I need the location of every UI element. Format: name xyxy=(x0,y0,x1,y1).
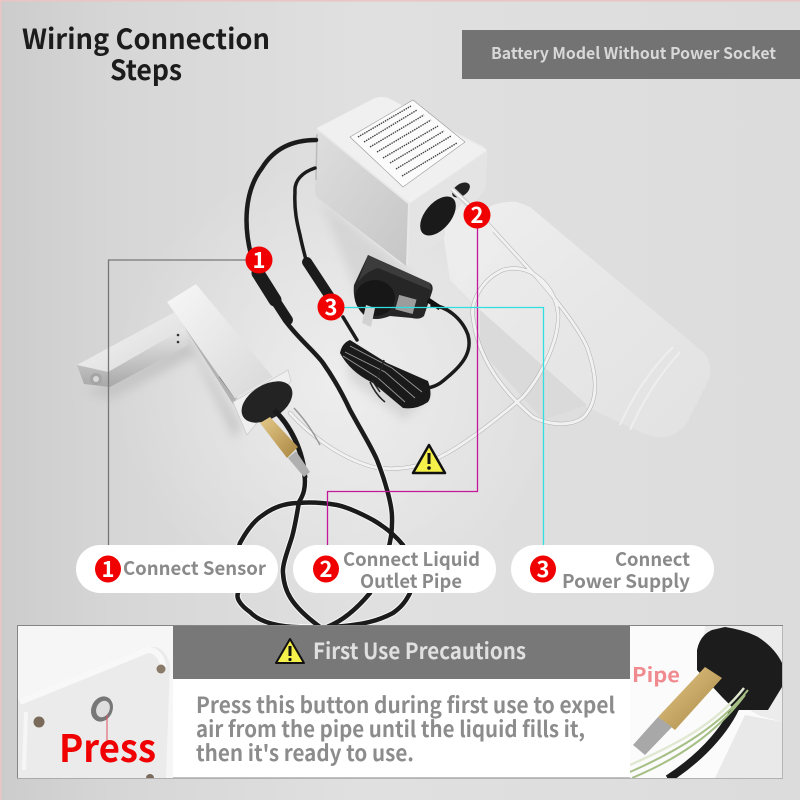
step pill 2: Connect Liquid xyxy=(343,545,480,572)
model banner xyxy=(462,30,800,79)
instruction text: then it's ready to use. xyxy=(196,736,414,768)
title: Steps xyxy=(110,49,182,89)
instruction text xyxy=(196,688,615,768)
soft shadows xyxy=(85,200,430,440)
header bar: First Use Precautions xyxy=(313,634,526,666)
marker 3: 3 xyxy=(325,290,337,322)
step pill 3: 3 xyxy=(537,552,549,584)
title xyxy=(22,18,270,89)
icon: warning xyxy=(276,639,304,663)
step pill 1: 1 xyxy=(102,552,114,584)
cable coil xyxy=(340,340,430,408)
step pill 1: Connect Sensor xyxy=(123,554,267,581)
marker 3 xyxy=(318,290,344,322)
marker 1 xyxy=(246,243,272,275)
panel: first use precautions xyxy=(18,626,783,782)
step pill 2 xyxy=(293,545,496,594)
warning icon on tube xyxy=(413,445,445,473)
faucet xyxy=(77,284,320,478)
step pill 1 xyxy=(76,545,278,593)
step pill 3: Connect xyxy=(615,545,690,572)
instruction text: Press this button during first use to expel xyxy=(196,688,615,720)
model banner: Battery Model Without Power Socket xyxy=(491,40,776,64)
soap bottle xyxy=(443,202,710,437)
marker 2: 2 xyxy=(471,198,483,230)
title: Wiring Connection xyxy=(22,18,270,58)
step pill 3 xyxy=(511,545,714,594)
photo: press button: Press xyxy=(59,718,156,773)
power cable xyxy=(295,168,469,388)
photo: press button xyxy=(18,626,173,782)
photo: pipe fitting: Pipe xyxy=(632,659,680,688)
header bar xyxy=(173,626,630,679)
transparent liquid tube xyxy=(290,223,595,469)
power adapter xyxy=(354,255,440,327)
outlet neck xyxy=(413,179,500,285)
instruction label xyxy=(350,100,465,187)
bottle shadow xyxy=(480,310,587,420)
sensor cable xyxy=(236,140,412,627)
step pill 2: 2 xyxy=(320,552,332,584)
marker 2 xyxy=(464,198,490,230)
step pill 3: Power Supply xyxy=(562,567,690,594)
callout lines xyxy=(108,228,544,555)
control box xyxy=(315,97,500,285)
step pill 2: Outlet Pipe xyxy=(360,567,462,594)
photo: pipe fitting xyxy=(630,626,783,779)
marker 1: 1 xyxy=(253,243,265,275)
instruction text: air from the pipe until the liquid fills it, xyxy=(196,712,585,744)
